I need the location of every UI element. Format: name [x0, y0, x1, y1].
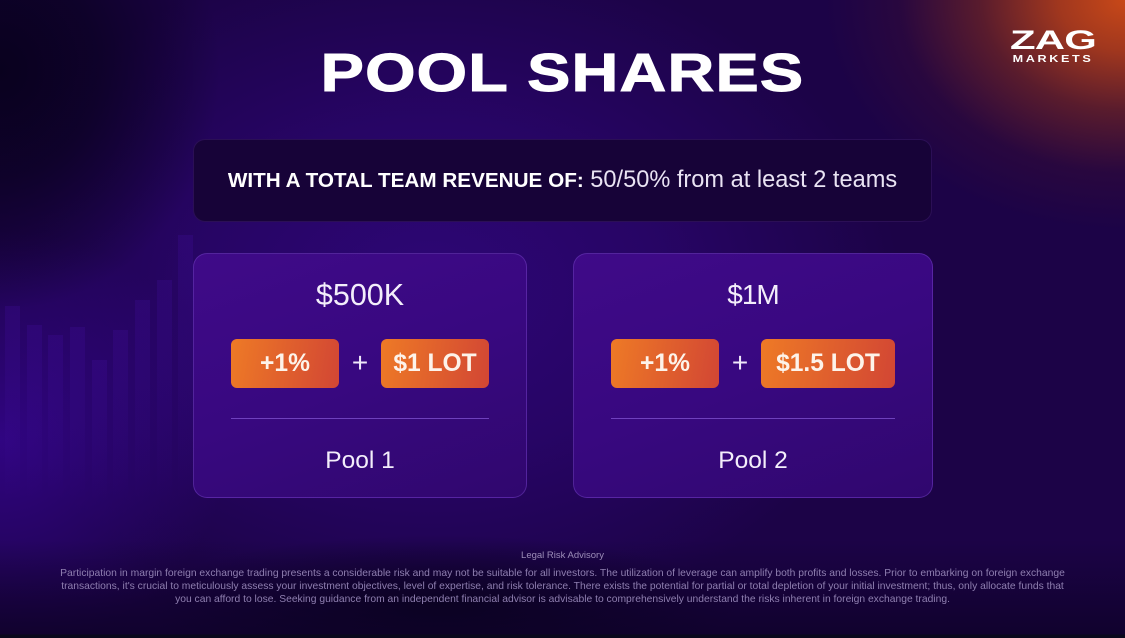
pool 1 plus sign: +: [352, 347, 368, 378]
advisory text: you can afford to lose. Seeking guidance from an independent financial advisor is advisable to comprehensively understand the risks inherent in foreign exchange trading.: [175, 594, 950, 605]
pool 2 label: Pool 2: [718, 447, 788, 474]
pool 2 percentage tag: [611, 339, 719, 388]
pool 2 lot tag: [761, 339, 895, 388]
advisory text: transactions, it's crucial to meticulously assess your investment objectives, level of expertise, and risk tolerance. There exists the potential for partial or total depletion of your initial investment; thus, only allocate funds that: [61, 581, 1064, 592]
legal risk advisory: [60, 550, 1065, 605]
panel: team revenue requirement: [193, 139, 932, 222]
pool 2 plus sign: +: [732, 347, 748, 378]
pool 2 lot tag: $1.5 LOT: [776, 350, 880, 377]
logo wordmark: ZAG: [1010, 25, 1096, 55]
pool 1 percentage tag: +1%: [260, 350, 310, 377]
title: POOL SHARES: [321, 43, 804, 103]
pool 1 lot tag: $1 LOT: [393, 350, 477, 377]
panel: pool 2: [573, 253, 933, 498]
background bar chart pattern: [5, 235, 193, 414]
pool 1 percentage tag: [231, 339, 339, 388]
pool 1 revenue target: $500K: [316, 278, 404, 312]
pool 2 percentage tag: +1%: [640, 350, 690, 377]
pool 2 revenue target: $1M: [727, 279, 779, 310]
pool 1 lot tag: [381, 339, 489, 388]
panel: pool 1: [193, 253, 527, 498]
advisory text: Participation in margin foreign exchange trading presents a considerable risk and may not be suitable for all investors. The utilization of leverage can amplify both profits and losses. Prior to embarking on foreign exchange: [60, 568, 1065, 579]
pool 1 label: Pool 1: [325, 447, 395, 474]
panel: team revenue requirement: WITH A TOTAL TEAM REVENUE OF: 50/50% from at least 2 teams: [228, 167, 897, 193]
logo subtitle: MARKETS: [1013, 53, 1093, 65]
logo: ZAG Markets: [1010, 25, 1096, 65]
advisory text: [60, 568, 1065, 605]
advisory heading: Legal Risk Advisory: [521, 550, 604, 561]
